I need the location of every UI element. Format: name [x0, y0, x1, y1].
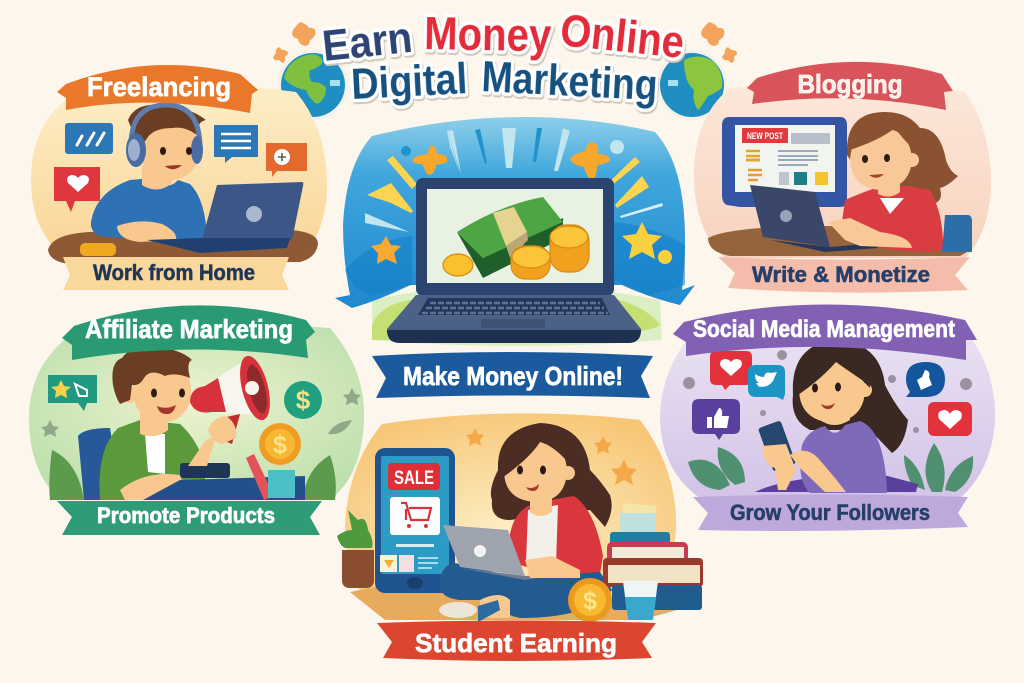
floor [350, 586, 700, 620]
panel: freelancing [31, 86, 327, 264]
icon: twitter bubble [748, 365, 785, 400]
rays [365, 128, 663, 232]
desk [48, 228, 318, 264]
icon: left globe [278, 50, 348, 120]
banner: freelancing [57, 65, 258, 113]
icon: coin [259, 423, 301, 465]
banner: write & monetize [718, 257, 970, 293]
banner: work from home: Work from Home [93, 260, 255, 285]
icon: dollar coin [568, 578, 612, 622]
icon: heart tag [928, 402, 972, 436]
banner: grow your followers: Grow Your Followers [730, 500, 930, 525]
icon: heart bubble [54, 167, 100, 212]
banner: work from home [63, 257, 289, 290]
icon: dollar bubble: $ [296, 385, 311, 415]
icon: shopping phone: SALE [394, 468, 434, 489]
title: Marketing [480, 52, 659, 110]
ground glow [372, 285, 662, 346]
icon: laptop [147, 182, 303, 253]
icon: blog monitor: NEW POST [747, 131, 783, 141]
cash stack [457, 197, 563, 278]
decorative dots [683, 350, 972, 433]
title [320, 4, 687, 110]
hand [828, 218, 912, 248]
icon: laptop [443, 525, 558, 580]
foliage right [904, 443, 973, 492]
hills [345, 222, 685, 296]
foliage right [303, 455, 336, 500]
icon: cup [623, 581, 658, 620]
panel: affiliate marketing [29, 324, 364, 500]
banner: affiliate marketing: Affiliate Marketing [85, 314, 293, 344]
icon: dollar bubble [284, 381, 322, 419]
icon: code tag [65, 123, 113, 154]
chair [78, 428, 122, 500]
icon: blog monitor [722, 117, 847, 207]
banner: make money online: Make Money Online! [403, 361, 623, 391]
title: Digital [350, 54, 468, 109]
banner: grow your followers [693, 494, 968, 531]
icon: megaphone [188, 353, 276, 466]
icon: coin: $ [273, 431, 287, 459]
icon: star tag [48, 375, 97, 411]
icon: laptop [750, 185, 878, 252]
coin pile [443, 225, 589, 279]
title: Earn [320, 13, 415, 71]
panel: student earning [337, 413, 703, 622]
cushion [755, 474, 918, 492]
icon: stack of books [603, 503, 703, 610]
icon: thumbs-up circle [906, 362, 945, 397]
banner: student earning [377, 620, 656, 661]
icon: heart bubble [710, 351, 752, 390]
character: blogger [842, 112, 958, 252]
title: Money [424, 7, 552, 61]
character: affiliate marketer [99, 347, 207, 500]
icon: laptop desk [143, 463, 305, 500]
banner: blogging [747, 62, 953, 110]
icon: thumbs-up bubble [692, 399, 740, 440]
decorative title stars [273, 22, 737, 63]
icon: plus bubble [266, 143, 307, 177]
panel: blogging [694, 82, 991, 258]
character: freelancer [91, 105, 207, 242]
banner: affiliate marketing [62, 305, 315, 360]
decorative leaves [41, 388, 361, 437]
icon: dollar coin: $ [583, 587, 597, 615]
foliage left [688, 447, 745, 490]
icon: message bubble [214, 125, 258, 163]
banner: social media management [673, 304, 977, 360]
icon: potted plant [337, 510, 374, 588]
banner: student earning: Student Earning [415, 628, 617, 658]
banner: blogging: Blogging [798, 69, 902, 99]
title: Online [558, 4, 687, 68]
banner: promote products [57, 501, 322, 535]
panel: make money online [335, 117, 695, 346]
icon: product cards [246, 454, 295, 500]
chair [942, 215, 972, 252]
character: social manager [758, 340, 908, 493]
banner: freelancing: Freelancing [87, 72, 231, 102]
banner: write & monetize: Write & Monetize [752, 262, 930, 287]
icon: shopping phone [375, 448, 455, 593]
panel: social media management [660, 326, 995, 498]
icon: saucer cup [439, 602, 477, 618]
character: student [440, 423, 612, 622]
decorative stars [466, 428, 637, 485]
foliage left [49, 450, 84, 500]
hands [525, 556, 580, 578]
banner: promote products: Promote Products [97, 503, 275, 528]
decorative stars [371, 142, 662, 264]
banner: social media management: Social Media Management [693, 316, 955, 343]
icon: laptop with cash and coins [387, 178, 641, 343]
icon: coins [80, 243, 116, 256]
desk [708, 226, 967, 256]
icon: right globe [657, 50, 727, 120]
banner: make money online [372, 352, 653, 398]
